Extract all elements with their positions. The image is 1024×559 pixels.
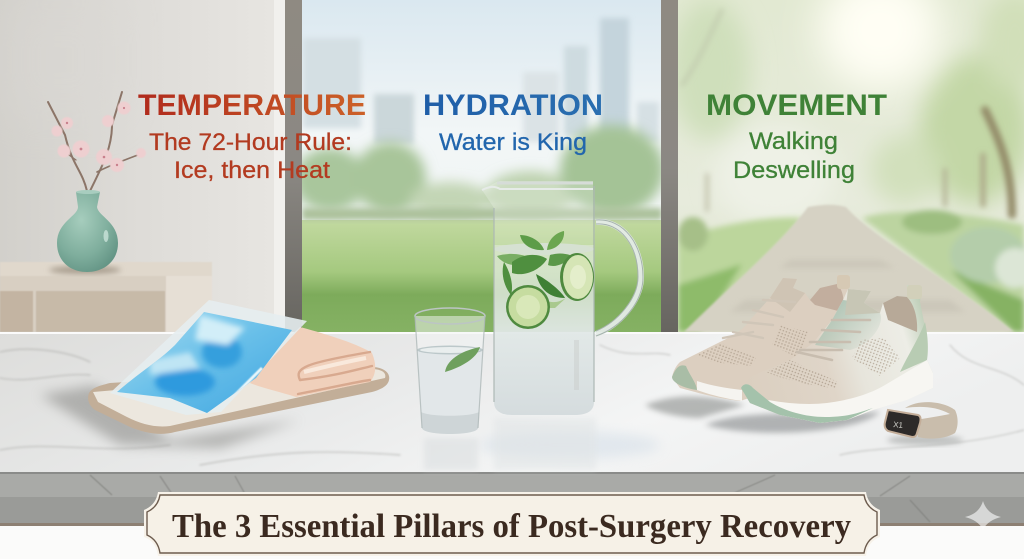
background: park path with trees bbox=[670, 0, 1024, 335]
subtext: ice then heat: Ice, then Heat bbox=[174, 157, 330, 184]
counter edge bbox=[0, 472, 1024, 559]
text block: temperature bbox=[138, 89, 366, 184]
cucumber slices bbox=[506, 285, 550, 329]
icon: fitness band: X1 bbox=[893, 420, 904, 430]
cabinet bbox=[0, 262, 212, 332]
window frames bbox=[285, 0, 678, 335]
tray bbox=[88, 367, 389, 434]
handle bbox=[596, 222, 641, 334]
subtext: 72-hour rule: The 72-Hour Rule: bbox=[149, 129, 352, 156]
back shoe bbox=[672, 275, 850, 401]
mint leaves bbox=[497, 231, 572, 308]
subtext: walking: Walking bbox=[749, 128, 838, 155]
front sole bbox=[768, 360, 933, 423]
icon: pitcher with cucumber and mint bbox=[482, 181, 643, 470]
tray with towel and ice pack bbox=[40, 300, 389, 448]
heading: hydration: HYDRATION bbox=[423, 89, 603, 122]
background: interior wall bbox=[0, 0, 285, 335]
text block: movement bbox=[706, 89, 887, 184]
subtext: deswelling: Deswelling bbox=[733, 157, 855, 184]
marble countertop bbox=[0, 332, 1024, 472]
front shoe bbox=[741, 285, 933, 423]
ice pack bbox=[110, 300, 307, 415]
background: city park window bbox=[294, 0, 664, 335]
heading: temperature: TEMPERATURE bbox=[138, 89, 366, 122]
title text: The 3 Essential Pillars of Post-Surgery Recovery bbox=[172, 508, 851, 545]
towel bbox=[250, 327, 375, 397]
subtext: water is king: Water is King bbox=[439, 129, 587, 156]
icon: walking shoes bbox=[645, 275, 933, 433]
glass body bbox=[482, 181, 593, 415]
heading: movement: MOVEMENT bbox=[706, 89, 887, 122]
title banner bbox=[144, 492, 880, 556]
icon: vase with blossoms bbox=[48, 92, 146, 274]
front outsole bbox=[741, 384, 873, 423]
icon: water glass bbox=[415, 308, 485, 470]
icon: sparkle watermark bbox=[965, 501, 1001, 530]
text block: hydration bbox=[423, 89, 603, 156]
icon: fitness band bbox=[885, 402, 963, 445]
